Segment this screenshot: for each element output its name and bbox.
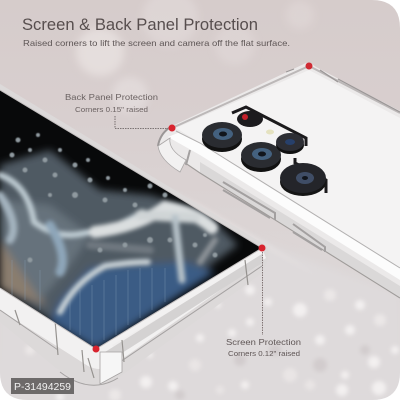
- phone: back panel in clear case: [158, 62, 400, 298]
- callout: back panel protection: Corners 0.15" raised: [75, 105, 148, 114]
- callout: back panel protection: [65, 92, 168, 128]
- lens D: [280, 163, 326, 196]
- back case body: [158, 63, 400, 298]
- product id badge: P-31494259: [14, 382, 71, 393]
- red dot: back left: [168, 124, 176, 132]
- callout: screen protection: Corners 0.12" raised: [228, 349, 300, 358]
- title: Screen & Back Panel Protection: [22, 15, 258, 34]
- callout: screen protection: [226, 252, 301, 358]
- top right corner detail: [286, 69, 400, 112]
- lens: top small red: [237, 111, 263, 127]
- callout: screen protection: Screen Protection: [226, 337, 301, 347]
- phone: front screen in clear case: [0, 84, 266, 386]
- lens B: [241, 142, 281, 172]
- red dot: screen right: [258, 244, 266, 252]
- product id badge: [11, 378, 74, 394]
- lens A: [202, 122, 242, 152]
- side buttons: [186, 150, 325, 252]
- screen wallpaper: [0, 90, 259, 347]
- callout: back panel protection: Back Panel Protection: [65, 92, 158, 102]
- red dot: back top: [306, 62, 312, 70]
- front case body: [0, 84, 220, 356]
- red dot: screen bottom: [92, 346, 100, 352]
- subtitle: Raised corners to lift the screen and camera off the flat surface.: [23, 38, 290, 48]
- camera island: [232, 107, 326, 193]
- lens C: [276, 133, 304, 154]
- glitter bokeh floor: [26, 284, 400, 400]
- flash: [266, 130, 274, 134]
